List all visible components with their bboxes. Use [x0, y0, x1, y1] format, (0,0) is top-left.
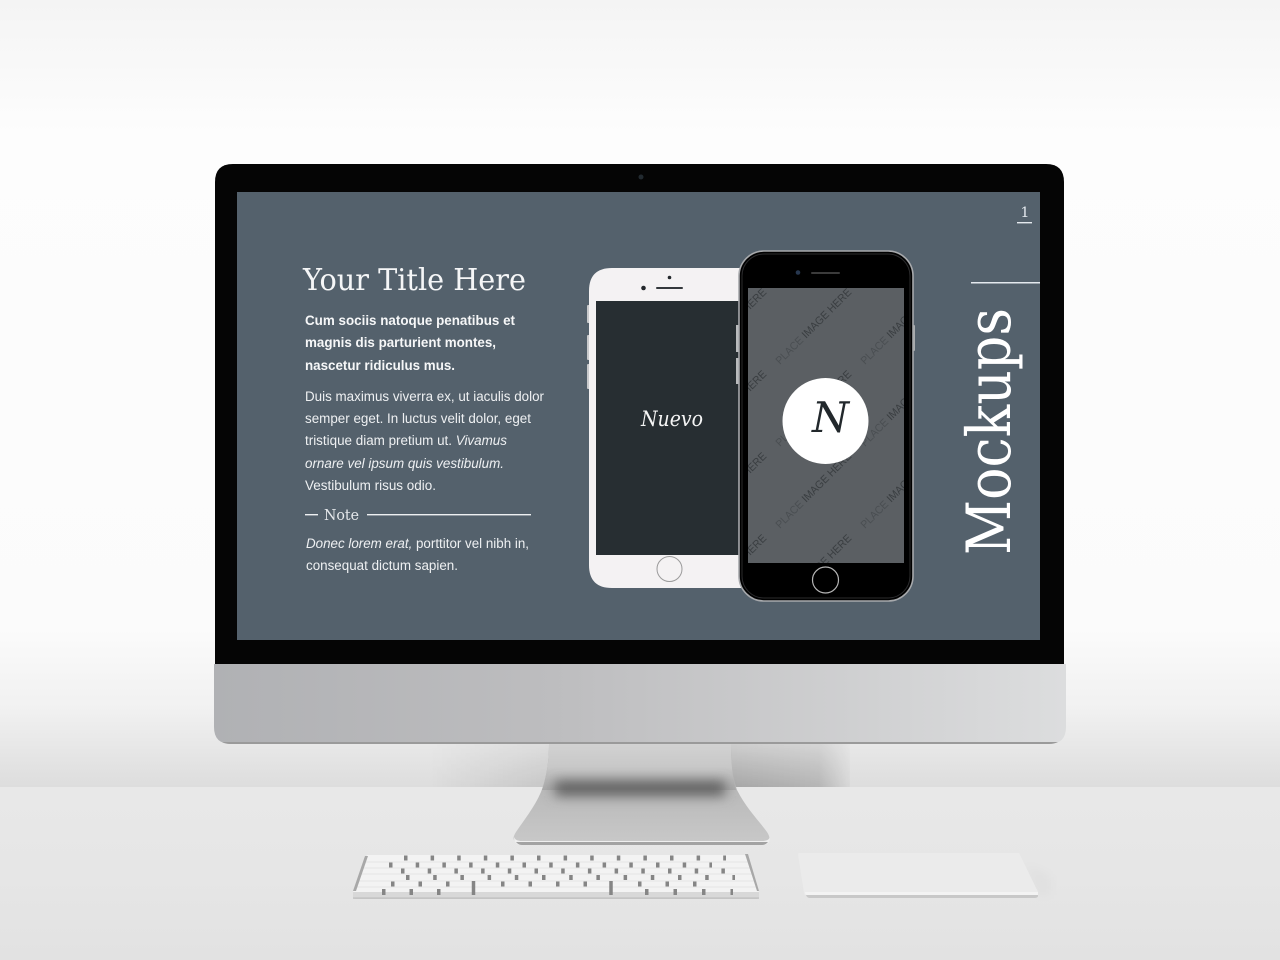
placeholder watermarks: PLACE IMAGE HERE: [689, 369, 769, 449]
trackpad shadow: [1025, 865, 1050, 895]
keyboard body: [353, 855, 759, 898]
body text: semper eget. In luctus velit dolor, eget: [305, 411, 531, 426]
screen: [596, 301, 739, 555]
desk surface: [0, 787, 1280, 960]
phone label: Nuevo: [640, 407, 703, 431]
key gaps: [382, 858, 735, 895]
placeholder watermarks: PLACE IMAGE HERE: [859, 451, 939, 531]
note text: Donec lorem erat, porttitor vel nibh in,: [306, 536, 529, 551]
monitor stand: [514, 744, 770, 845]
body text: tristique diam pretium ut. Vivamus: [305, 433, 507, 448]
side button: [912, 325, 915, 351]
webcam: [638, 174, 644, 180]
chin lower edge: [222, 742, 1058, 744]
bold intro text: [305, 313, 516, 373]
vertical rule: [971, 282, 1040, 284]
body text: [305, 389, 544, 493]
white phone: [587, 268, 745, 588]
body: [739, 251, 913, 601]
bold intro text: nascetur ridiculus mus.: [305, 358, 455, 373]
bold intro text: magnis dis parturient montes,: [305, 335, 496, 350]
home button: [812, 567, 838, 593]
row lines: [356, 862, 756, 887]
trackpad surface: [798, 853, 1038, 895]
page number: 1: [1021, 205, 1029, 221]
monitor chin: [214, 664, 1066, 744]
placeholder watermarks: PLACE IMAGE HERE: [774, 533, 854, 613]
placeholder watermarks: PLACE IMAGE HERE: [859, 287, 939, 367]
placeholder watermarks: PLACE IMAGE HERE: [689, 533, 769, 613]
inner edge: [742, 254, 910, 598]
screen panel: [237, 192, 1040, 640]
keyboard: [353, 854, 759, 899]
vertical heading: Mockups: [954, 308, 1025, 555]
camera and speaker: [796, 270, 800, 275]
body text: Vestibulum risus odio.: [305, 478, 436, 493]
note heading with rules: Note: [324, 506, 359, 524]
page number: [1017, 205, 1032, 223]
black phone: [738, 250, 915, 602]
stand shadow on wall: [474, 744, 846, 787]
placeholder watermarks: PLACE IMAGE HERE: [859, 369, 939, 449]
body text: ornare vel ipsum quis vestibulum.: [305, 456, 504, 471]
placeholder watermarks: [748, 288, 904, 563]
placeholder watermarks: PLACE IMAGE HERE: [774, 451, 854, 531]
logo letter: N: [811, 393, 850, 442]
trackpad: [798, 853, 1050, 898]
placeholder watermarks: PLACE IMAGE HERE: [689, 287, 769, 367]
monitor: [214, 164, 1066, 744]
placeholder watermarks: PLACE IMAGE HERE: [774, 369, 854, 449]
logo circle: [782, 378, 868, 464]
note text: [306, 536, 529, 573]
image placeholder screen: [748, 288, 904, 563]
placeholder watermarks: PLACE IMAGE HERE: [689, 451, 769, 531]
monitor bezel: [215, 164, 1064, 664]
title: Your Title Here: [302, 263, 526, 298]
body text: Duis maximus viverra ex, ut iaculis dolor: [305, 389, 544, 404]
sensor dots and speaker: [668, 276, 671, 279]
note text: consequat dictum sapien.: [306, 558, 458, 573]
bold intro text: Cum sociis natoque penatibus et: [305, 313, 516, 328]
left side buttons: [587, 305, 590, 323]
right side buttons: [736, 325, 739, 352]
placeholder watermarks: PLACE IMAGE HERE: [774, 287, 854, 367]
body: [589, 268, 745, 588]
home button: [657, 556, 682, 582]
keyboard edges: [353, 854, 759, 891]
